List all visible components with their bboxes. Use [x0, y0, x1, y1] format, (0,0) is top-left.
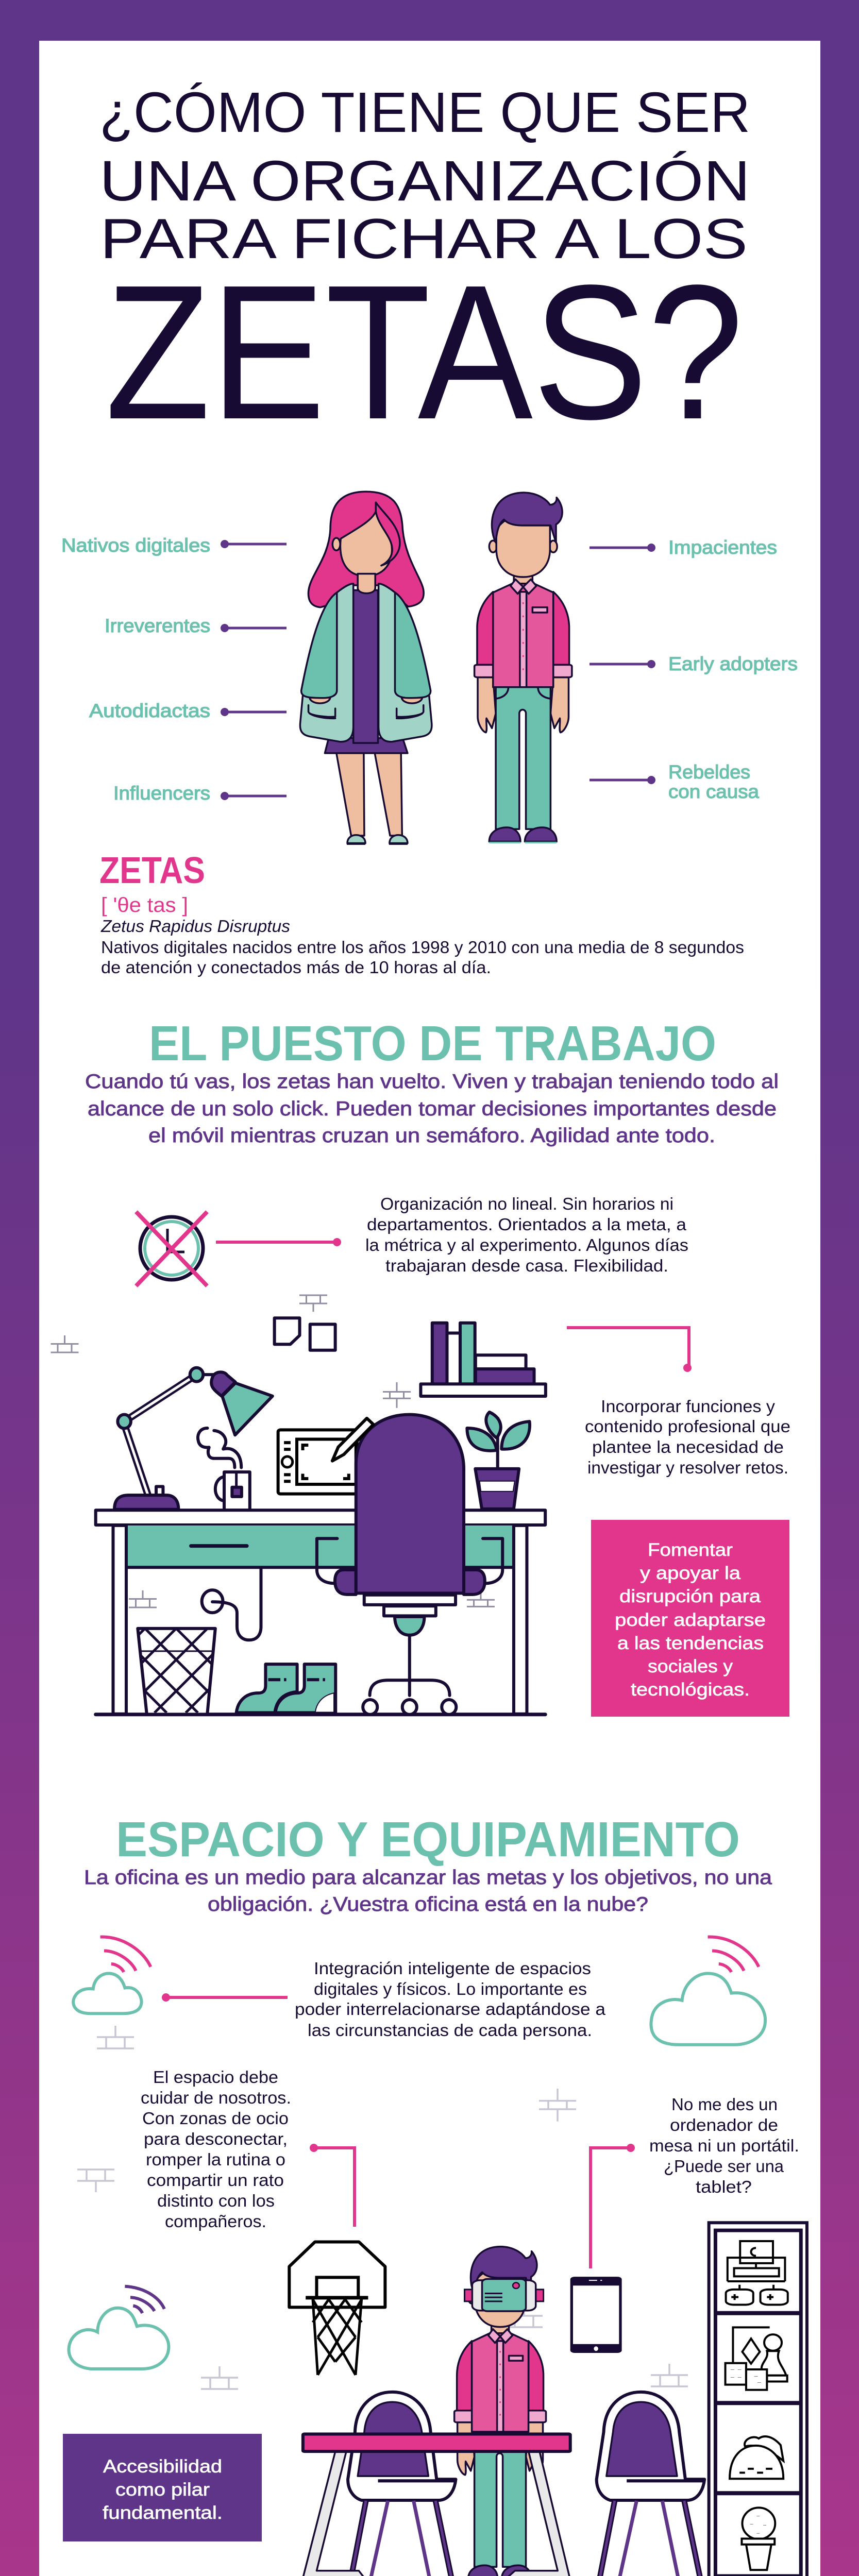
text: incorporar funciones: investigar y resolver retos. — [587, 1458, 788, 1477]
text: incorporar funciones: plantee la necesidad de — [592, 1437, 784, 1456]
intro: espacio y equipamiento: La oficina es un medio para alcanzar las metas y los objetivos, no una — [84, 1867, 772, 1889]
callout: fomentar: tecnológicas. — [631, 1680, 750, 1700]
table — [303, 2434, 570, 2576]
connector: shelf to text — [567, 1328, 692, 1372]
office chair — [317, 1415, 502, 1715]
traits right with connectors: con causa — [668, 781, 759, 802]
boots — [237, 1664, 335, 1713]
text: no me des un ordenador — [649, 2095, 799, 2196]
stylus — [332, 1418, 374, 1461]
traits left with connectors: Irreverentes — [105, 615, 210, 636]
text: no me des un ordenador: ¿Puede ser una — [664, 2157, 784, 2176]
text: integración inteligente: poder interrelacionarse adaptándose a — [295, 1999, 606, 2019]
callout: fomentar: sociales y — [648, 1656, 733, 1676]
callout: fomentar: a las tendencias — [617, 1633, 764, 1653]
icon: papers — [275, 1318, 335, 1350]
title: ¿CÓMO TIENE QUE SER — [99, 81, 750, 144]
text: el espacio debe: distinto con los — [157, 2191, 275, 2210]
icon: basketball hoop — [289, 2242, 385, 2375]
illustration: shelf with books — [420, 1323, 546, 1396]
lamp — [114, 1368, 273, 1510]
text: incorporar funciones: contenido profesional que — [585, 1417, 790, 1436]
traits right with connectors: Rebeldes — [668, 761, 750, 783]
arcade icons — [726, 2241, 788, 2304]
traits left with connectors: Nativos digitales — [61, 535, 210, 556]
text: no me des un ordenador: mesa ni un portátil. — [649, 2136, 799, 2155]
icon: large cloud with wifi — [651, 1937, 765, 2045]
text: el espacio debe: cuidar de nosotros. — [141, 2088, 291, 2107]
callout: fomentar: y apoyar la — [640, 1563, 741, 1583]
text: no me des un ordenador: ordenador de — [670, 2115, 778, 2134]
text: organización no lineal: la métrica y al experimento. Algunos días — [365, 1235, 688, 1255]
title: UNA ORGANIZACIÓN — [99, 149, 750, 213]
illustration: desk with lamp, tablet, plant, chair — [52, 1368, 545, 1715]
text: integración inteligente — [295, 1959, 606, 2040]
text: el espacio debe: compartir un rato — [147, 2171, 284, 2190]
text: incorporar funciones — [585, 1397, 790, 1477]
board game icons — [726, 2327, 787, 2390]
text: organización no lineal — [365, 1194, 688, 1275]
man with VR headset — [454, 2247, 546, 2576]
callout: accesibilidad: como pilar — [115, 2480, 210, 2500]
text: el espacio debe: compañeros. — [165, 2212, 266, 2231]
illustration: man — [475, 493, 572, 842]
graphics tablet — [278, 1430, 357, 1494]
text: integración inteligente: digitales y físicos. Lo importante es — [314, 1979, 587, 1998]
game shelf — [709, 2223, 807, 2576]
definition of ZETAS: ZETAS — [99, 850, 205, 891]
stool right — [597, 2392, 705, 2576]
plant — [467, 1412, 530, 1509]
connector: text to tablet — [591, 2144, 635, 2268]
illustration: woman — [300, 492, 432, 845]
traits left with connectors — [61, 535, 287, 804]
traits right with connectors: Impacientes — [668, 537, 777, 558]
heading: el puesto de trabajo: EL PUESTO DE TRABAJO — [149, 1016, 716, 1071]
intro: el puesto de trabajo — [85, 1071, 779, 1147]
callout: fomentar: disrupción para — [619, 1586, 761, 1606]
heading: espacio y equipamiento: ESPACIO Y EQUIPAMIENTO — [116, 1812, 740, 1867]
traits left with connectors: Autodidactas — [89, 700, 210, 721]
intro: el puesto de trabajo: el móvil mientras cruzan un semáforo. Agilidad ante todo. — [148, 1125, 715, 1147]
icon: small cloud with wifi — [73, 1937, 150, 2013]
text: integración inteligente: Integración inteligente de espacios — [314, 1959, 591, 1978]
icon: tablet device — [570, 2277, 622, 2353]
title: ZETAS? — [105, 245, 744, 459]
intro: espacio y equipamiento: obligación. ¿Vuestra oficina está en la nube? — [208, 1893, 648, 1916]
title — [99, 81, 750, 459]
text: organización no lineal: Organización no lineal. Sin horarios ni — [380, 1194, 673, 1213]
scene: VR man at table with stools and shelf — [65, 2223, 808, 2576]
definition of ZETAS: de atención y conectados más de 10 horas al día. — [101, 958, 491, 977]
wastebasket — [136, 1627, 217, 1713]
desk — [96, 1510, 545, 1715]
definition of ZETAS: [ 'θe tas ] — [101, 894, 188, 917]
callout: accesibilidad: Accesibilidad — [103, 2456, 222, 2477]
definition of ZETAS: Zetus Rapidus Disruptus — [100, 917, 290, 936]
text: el espacio debe: Con zonas de ocio — [142, 2109, 289, 2128]
callout: accesibilidad — [63, 2434, 262, 2541]
callout: fomentar — [591, 1520, 789, 1717]
cable — [202, 1569, 261, 1640]
text: incorporar funciones: Incorporar funciones y — [601, 1397, 776, 1416]
text: el espacio debe: para desconectar, — [144, 2129, 288, 2148]
connector: cloud to text — [162, 1993, 288, 2002]
icon: cloud with purple wifi — [69, 2286, 169, 2369]
traits left with connectors: Influencers — [113, 783, 210, 804]
text: no me des un ordenador: No me des un — [671, 2095, 778, 2114]
definition of ZETAS — [99, 850, 744, 977]
traits right with connectors: Early adopters — [668, 653, 798, 674]
definition of ZETAS: Nativos digitales nacidos entre los años 1998 y 2010 con una media de 8 segundos — [101, 938, 744, 957]
cactus icon — [742, 2507, 775, 2570]
callout: accesibilidad: fundamental. — [103, 2503, 223, 2523]
traits right with connectors — [589, 537, 798, 802]
text: el espacio debe — [141, 2067, 291, 2231]
intro: espacio y equipamiento — [84, 1867, 772, 1916]
text: no me des un ordenador: tablet? — [696, 2177, 752, 2196]
intro: el puesto de trabajo: Cuando tú vas, los zetas han vuelto. Viven y trabajan teniendo todo al — [85, 1071, 779, 1093]
text: el espacio debe: romper la rutina o — [146, 2150, 285, 2169]
text: organización no lineal: departamentos. Orientados a la meta, a — [367, 1215, 687, 1234]
connector: clock to text — [216, 1238, 341, 1246]
title: PARA FICHAR A LOS — [100, 207, 748, 270]
callout: fomentar: poder adaptarse — [615, 1610, 766, 1630]
taco icon — [730, 2436, 783, 2479]
steam and mug — [198, 1428, 250, 1510]
text: el espacio debe: El espacio debe — [153, 2067, 278, 2087]
text: integración inteligente: las circunstancias de cada persona. — [308, 2021, 592, 2040]
callout: fomentar: Fomentar — [648, 1540, 733, 1560]
text: organización no lineal: trabajaran desde casa. Flexibilidad. — [385, 1256, 668, 1275]
connector: text to hoop — [310, 2144, 355, 2227]
stool left — [348, 2392, 457, 2576]
intro: el puesto de trabajo: alcance de un solo click. Pueden tomar decisiones importantes desde — [88, 1098, 777, 1120]
icon: crossed-out clock — [136, 1212, 207, 1286]
